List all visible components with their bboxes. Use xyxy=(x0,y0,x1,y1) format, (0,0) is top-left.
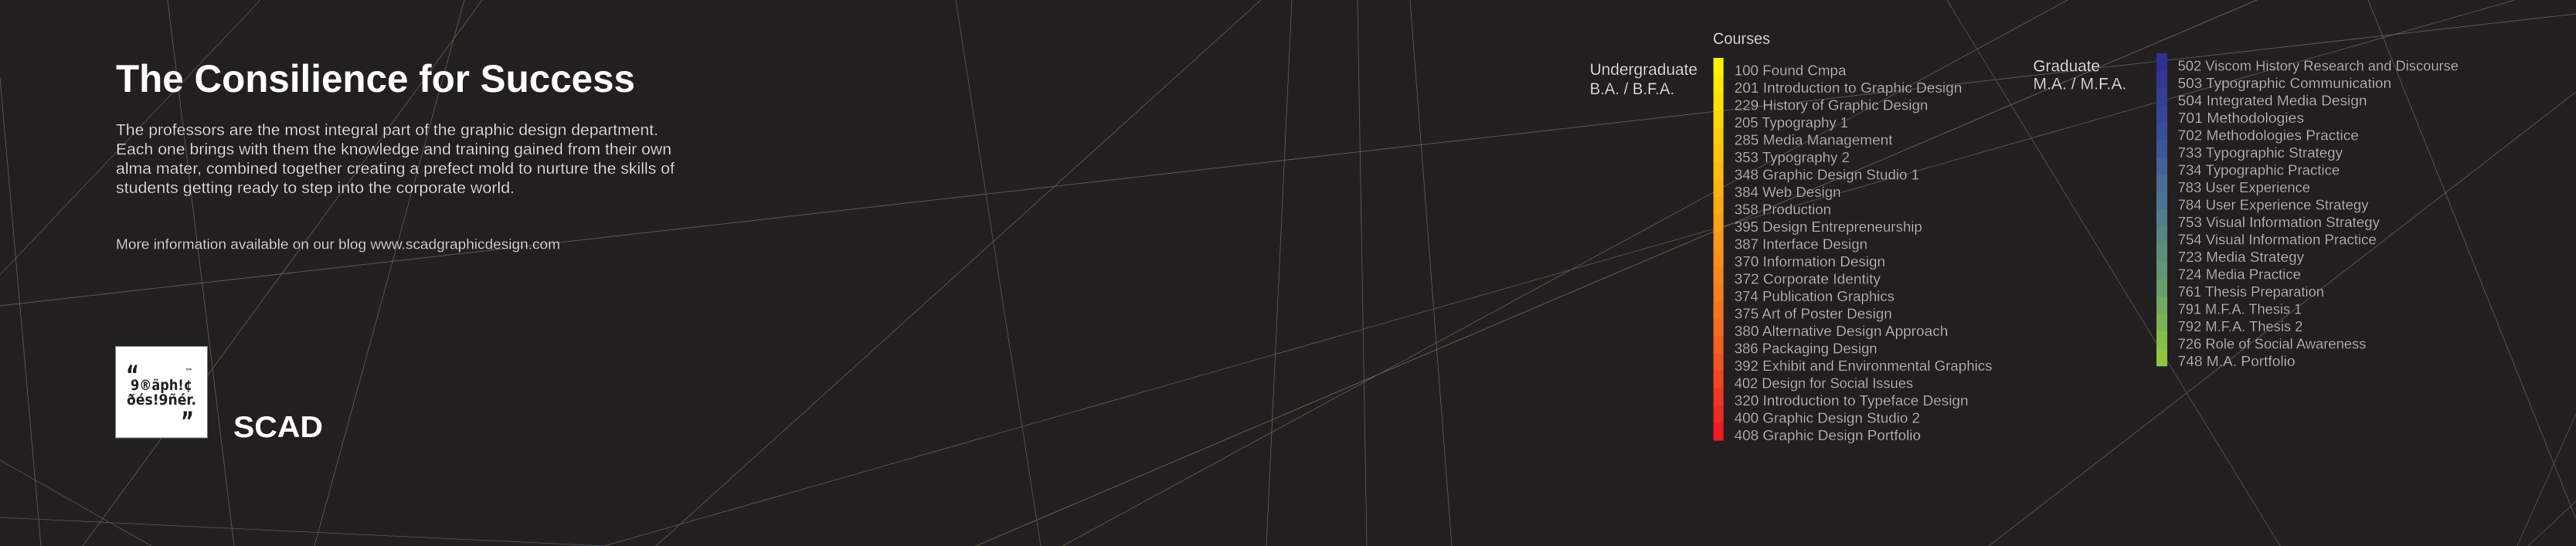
text block: intro paragraph: The professors are the most integral part of the graphic design department. xyxy=(116,122,658,139)
logo: graphic designer: ” xyxy=(181,406,194,437)
colour bar: graduate blue to green xyxy=(2156,53,2167,366)
course list: undergraduate: 201 Introduction to Graphic Design xyxy=(1735,80,1962,96)
course list: graduate: 726 Role of Social Awareness xyxy=(2178,335,2366,351)
course list: undergraduate: 370 Information Design xyxy=(1735,253,1885,270)
logo: graphic designer: “ xyxy=(126,360,139,391)
course list: graduate: 754 Visual Information Practice xyxy=(2178,231,2377,247)
text block: intro paragraph: alma mater, combined together creating a prefect mold to nurture the skills of xyxy=(116,161,675,178)
heading: undergraduate xyxy=(1590,61,1698,98)
course list: undergraduate: 285 Media Management xyxy=(1735,131,1893,148)
course list: undergraduate: 358 Production xyxy=(1735,201,1831,217)
logo: graphic designer xyxy=(116,346,207,438)
course list: undergraduate: 375 Art of Poster Design xyxy=(1735,305,1892,321)
logo: graphic designer: ™ xyxy=(185,368,193,375)
heading: graduate: M.A. / M.F.A. xyxy=(2033,76,2126,93)
heading: graduate xyxy=(2033,57,2126,93)
course list: undergraduate: 320 Introduction to Typeface Design xyxy=(1735,392,1969,409)
logo: SCAD: SCAD xyxy=(233,411,323,444)
course list: undergraduate: 386 Packaging Design xyxy=(1735,340,1878,356)
course list: graduate: 753 Visual Information Strategy xyxy=(2178,214,2381,230)
heading: courses: Courses xyxy=(1713,30,1770,48)
course list: graduate: 502 Viscom History Research and Discourse xyxy=(2178,57,2459,73)
logo: graphic designer: 9®äph!¢ xyxy=(131,377,192,394)
title: The Consilience for Success xyxy=(116,57,635,100)
course list: graduate: 748 M.A. Portfolio xyxy=(2178,353,2295,369)
course list: undergraduate: 387 Interface Design xyxy=(1735,236,1867,252)
course list: undergraduate: 408 Graphic Design Portfolio xyxy=(1735,427,1921,443)
course list: undergraduate: 380 Alternative Design Approach xyxy=(1735,323,1948,339)
course list: undergraduate xyxy=(1735,62,1992,443)
heading: graduate: Graduate xyxy=(2033,57,2100,75)
text block: intro paragraph xyxy=(116,122,675,197)
course list: graduate: 733 Typographic Strategy xyxy=(2178,144,2343,161)
course list: graduate: 702 Methodologies Practice xyxy=(2178,127,2359,143)
course list: graduate: 503 Typographic Communication xyxy=(2178,75,2391,91)
course list: undergraduate: 229 History of Graphic Design xyxy=(1735,97,1928,113)
text block: intro paragraph: students getting ready to step into the corporate world. xyxy=(116,180,515,197)
text block: intro paragraph: Each one brings with them the knowledge and training gained from their own xyxy=(116,141,671,158)
text block: blog link: More information available on our blog www.scadgraphicdesign.com xyxy=(116,236,560,253)
course list: graduate: 791 M.F.A. Thesis 1 xyxy=(2178,300,2302,317)
course list: graduate: 761 Thesis Preparation xyxy=(2178,283,2324,300)
colour bar: undergraduate yellow to red xyxy=(1714,58,1724,441)
course list: graduate: 701 Methodologies xyxy=(2178,110,2304,126)
course list: undergraduate: 402 Design for Social Issues xyxy=(1735,375,1913,391)
course list: graduate: 723 Media Strategy xyxy=(2178,249,2305,265)
course list: undergraduate: 400 Graphic Design Studio 2 xyxy=(1735,409,1920,426)
course list: graduate: 784 User Experience Strategy xyxy=(2178,196,2369,212)
course list: graduate: 792 M.F.A. Thesis 2 xyxy=(2178,318,2302,334)
course list: graduate: 783 User Experience xyxy=(2178,179,2310,195)
course list: undergraduate: 392 Exhibit and Environmental Graphics xyxy=(1735,358,1992,374)
course list: undergraduate: 353 Typography 2 xyxy=(1735,149,1850,165)
course list: undergraduate: 100 Found Cmpa xyxy=(1735,62,1847,78)
course list: graduate xyxy=(2178,57,2459,369)
course list: undergraduate: 348 Graphic Design Studio 1 xyxy=(1735,166,1919,182)
course list: graduate: 734 Typographic Practice xyxy=(2178,161,2340,178)
heading: undergraduate: Undergraduate xyxy=(1590,61,1698,79)
course list: graduate: 504 Integrated Media Design xyxy=(2178,92,2367,108)
course list: undergraduate: 384 Web Design xyxy=(1735,184,1840,200)
logo: graphic designer: ðés!9ñér. xyxy=(127,392,196,409)
course list: undergraduate: 374 Publication Graphics xyxy=(1735,288,1895,304)
heading: undergraduate: B.A. / B.F.A. xyxy=(1590,80,1674,98)
course list: undergraduate: 205 Typography 1 xyxy=(1735,114,1848,131)
course list: graduate: 724 Media Practice xyxy=(2178,266,2301,282)
course list: undergraduate: 395 Design Entrepreneurship xyxy=(1735,219,1922,235)
course list: undergraduate: 372 Corporate Identity xyxy=(1735,270,1881,287)
